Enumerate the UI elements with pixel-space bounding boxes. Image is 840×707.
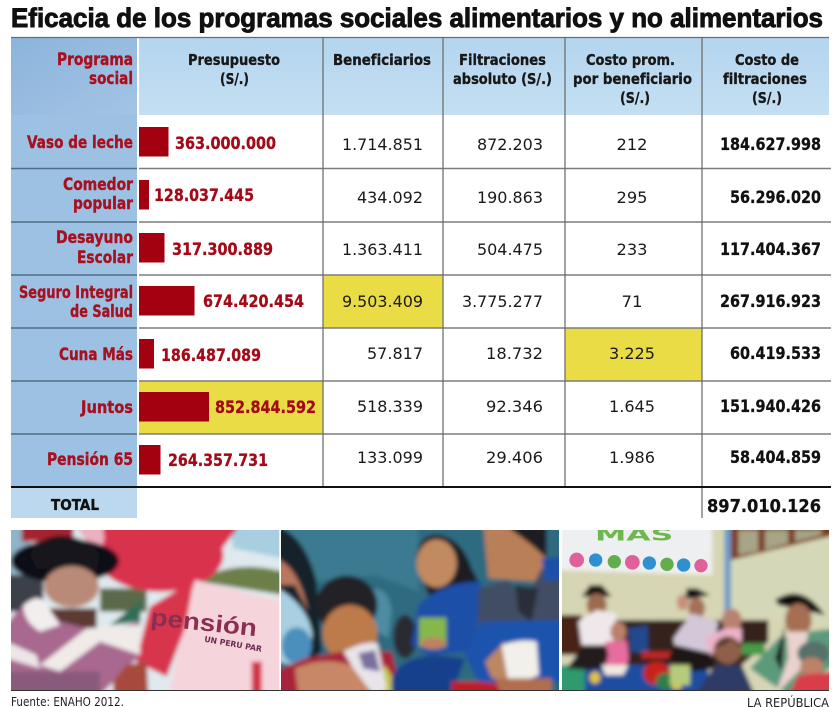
row: Seguro Integral de Salud: 9.503.409 bbox=[342, 292, 423, 311]
row: Seguro Integral de Salud: de Salud bbox=[70, 302, 133, 322]
row: Juntos: 1.645 bbox=[609, 397, 655, 416]
row: Seguro Integral de Salud: 267.916.923 bbox=[720, 292, 821, 311]
highlight: Seguro Integral beneficiaries bbox=[323, 275, 443, 328]
row: Pensión 65: 1.986 bbox=[609, 448, 655, 467]
row: Vaso de leche: 184.627.998 bbox=[720, 135, 821, 154]
header row background bbox=[139, 38, 829, 115]
photo: Cuna Más mothers and toddlers: MAS bbox=[595, 525, 673, 544]
row: Desayuno Escolar: 1.363.411 bbox=[342, 240, 423, 259]
row: Vaso de leche: Vaso de leche bbox=[27, 133, 133, 153]
highlight: Cuna Más average cost bbox=[565, 328, 702, 381]
row: Pensión 65: 58.404.859 bbox=[730, 448, 821, 467]
column headers bbox=[57, 50, 807, 107]
row: Pensión 65: 264.357.731 bbox=[168, 451, 268, 471]
photo: woman with Pensión 65 flag: UN PERU PAR bbox=[204, 635, 263, 654]
row: Juntos bbox=[80, 392, 821, 422]
row: Comedor popular: popular bbox=[73, 194, 133, 214]
highlight: Juntos budget bbox=[139, 381, 323, 434]
row: Cuna Más: 57.817 bbox=[367, 344, 423, 363]
row: Cuna Más bbox=[59, 339, 821, 368]
row: Pensión 65: 133.099 bbox=[357, 448, 423, 467]
row: Comedor popular: 128.037.445 bbox=[154, 186, 254, 206]
row: Juntos: Juntos bbox=[80, 398, 133, 418]
row: Comedor popular: Comedor bbox=[63, 175, 133, 195]
column headers: Presupuesto bbox=[188, 51, 280, 69]
row: Vaso de leche bbox=[27, 127, 821, 156]
row: Comedor popular: 190.863 bbox=[477, 188, 543, 207]
row: Pensión 65 bbox=[47, 445, 821, 474]
row: Comedor popular bbox=[63, 175, 821, 214]
table bbox=[11, 37, 831, 518]
total row: 897.010.126 bbox=[707, 496, 821, 517]
column headers: Filtraciones bbox=[459, 51, 546, 69]
column headers: por beneficiario bbox=[573, 70, 692, 88]
total label cell bbox=[11, 488, 137, 518]
row: Desayuno Escolar: 117.404.367 bbox=[720, 240, 821, 259]
column headers: (S/.) bbox=[220, 70, 249, 88]
column headers: absoluto (S/.) bbox=[453, 70, 552, 88]
column headers: Costo prom. bbox=[586, 51, 675, 69]
program header cell bbox=[11, 38, 137, 115]
row: Seguro Integral de Salud: Seguro Integral bbox=[19, 283, 133, 303]
row: Desayuno Escolar: Desayuno bbox=[56, 228, 133, 248]
row: Pensión 65: 29.406 bbox=[486, 448, 543, 467]
row: Vaso de leche: 363.000.000 bbox=[175, 134, 276, 154]
column headers: Costo de bbox=[735, 51, 799, 69]
row: Pensión 65: Pensión 65 bbox=[47, 450, 133, 470]
row: Juntos: 151.940.426 bbox=[720, 397, 821, 416]
row: Desayuno Escolar: Escolar bbox=[77, 248, 133, 268]
row: Cuna Más: 60.419.533 bbox=[730, 344, 821, 363]
column headers: (S/.) bbox=[752, 89, 782, 107]
row: Vaso de leche: 1.714.851 bbox=[342, 135, 423, 154]
row: Desayuno Escolar: 504.475 bbox=[477, 240, 543, 259]
total row: TOTAL bbox=[51, 496, 99, 514]
row: Juntos: 518.339 bbox=[357, 397, 423, 416]
row: Cuna Más: 3.225 bbox=[609, 344, 655, 363]
program label column bbox=[11, 38, 137, 487]
photo: woman with Pensión 65 flag: pensión bbox=[149, 604, 258, 642]
photo baseline rule bbox=[11, 690, 829, 692]
row: Seguro Integral de Salud: 71 bbox=[622, 292, 642, 311]
row: Desayuno Escolar: 317.300.889 bbox=[172, 240, 273, 260]
row: Juntos: 852.844.592 bbox=[215, 398, 316, 418]
row: Vaso de leche: 872.203 bbox=[477, 135, 543, 154]
row: Seguro Integral de Salud bbox=[19, 283, 821, 322]
row: Vaso de leche: 212 bbox=[616, 135, 648, 154]
column headers: Beneficiarios bbox=[333, 51, 431, 69]
row: Juntos: 92.346 bbox=[486, 397, 543, 416]
column headers: Programa bbox=[57, 50, 133, 70]
icon row: paper figures bbox=[569, 553, 708, 572]
column headers: filtraciones bbox=[723, 70, 807, 88]
row: Cuna Más: Cuna Más bbox=[59, 345, 133, 365]
row: Desayuno Escolar: 233 bbox=[616, 240, 648, 259]
photo: woman with Pensión 65 flag bbox=[11, 530, 280, 690]
row: Comedor popular: 295 bbox=[616, 188, 648, 207]
column headers: (S/.) bbox=[620, 89, 650, 107]
row: Comedor popular: 434.092 bbox=[357, 188, 423, 207]
row: Cuna Más: 186.487.089 bbox=[161, 346, 261, 366]
row: Cuna Más: 18.732 bbox=[486, 344, 543, 363]
row: Seguro Integral de Salud: 3.775.277 bbox=[462, 292, 543, 311]
column headers: social bbox=[89, 69, 133, 89]
title: Eficacia de los programas sociales alimentarios y no alimentarios bbox=[11, 3, 823, 33]
row: Comedor popular: 56.296.020 bbox=[730, 188, 821, 207]
photo: Cuna Más mothers and toddlers bbox=[562, 530, 829, 690]
row: Desayuno Escolar bbox=[56, 228, 821, 268]
photo: children drinking from cups bbox=[275, 525, 565, 695]
total row bbox=[51, 496, 821, 517]
row: Seguro Integral de Salud: 674.420.454 bbox=[203, 292, 304, 312]
